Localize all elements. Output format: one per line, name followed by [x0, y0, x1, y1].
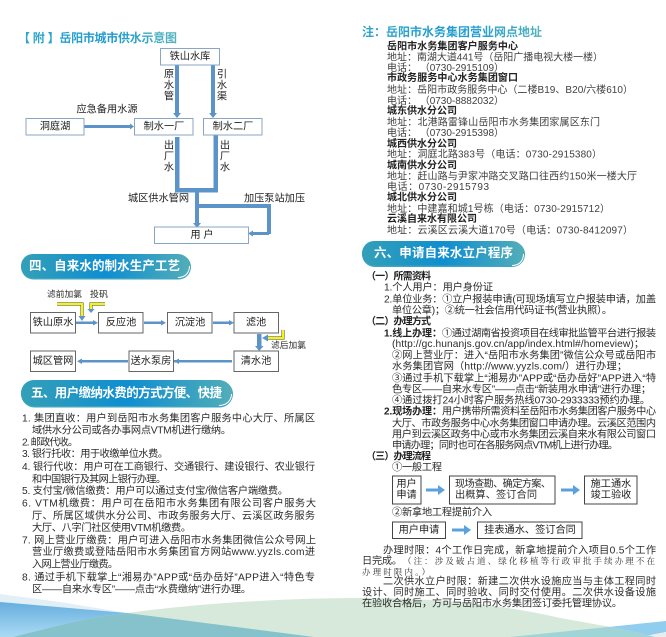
- address list: 城北供水分公司: [387, 190, 457, 204]
- application methods: ④通过拨打24小时客户服务热线0730-2933333预约办理。: [392, 394, 650, 406]
- application methods: (http://gc.hunanjs.gov.cn/app/index.html#/homeview)；: [392, 339, 644, 350]
- label: 城区供水管网: 城区供水管网: [128, 192, 189, 204]
- time limits text: 日完成。: [362, 554, 402, 567]
- address list: 地址：洞庭北路383号（电话：0730-2915380）: [387, 148, 602, 160]
- box: 施工通水: [584, 476, 637, 504]
- box: 制水二厂: 制水二厂: [213, 120, 253, 132]
- arrow: [561, 485, 580, 495]
- application methods: ①通过湖南省投资项目在线审批监管平台进行报装: [442, 326, 656, 340]
- payment methods list: 营业厅缴费或登陆岳阳市水务集团官方网站www.yyzls.com进: [32, 545, 315, 558]
- box: 洞庭湖: 洞庭湖: [40, 120, 70, 132]
- box: 制水二厂: [204, 118, 262, 135]
- address list: 电话： （0730-8882032）: [387, 94, 504, 107]
- diagram: city water supply: [26, 48, 305, 244]
- box: 施工通水: 施工通水: [591, 477, 631, 490]
- label: 原水管: [164, 68, 174, 102]
- box: 铁山原水: [30, 312, 76, 333]
- time limits text: 办理时限内。）: [362, 567, 430, 577]
- box: 用户申请: 用户申请: [399, 523, 439, 536]
- address list: 地址：南湖大道441号（岳阳广播电视大楼一楼）: [387, 50, 603, 64]
- box: 送水泵房: [129, 351, 174, 372]
- payment methods list: 大厅、八字门社区使用VTM机缴费。: [32, 521, 191, 534]
- time limits text: 二次供水立户时限：新建二次供水设施应当与主体工程同时: [383, 574, 656, 588]
- box: 城区管网: [30, 351, 76, 372]
- label: 引水渠: [217, 68, 227, 102]
- address list: 岳阳市水务集团客户服务中心: [387, 40, 518, 52]
- arrow: [452, 525, 471, 535]
- box: 铁山原水: 铁山原水: [33, 316, 73, 328]
- box: 制水一厂: [134, 118, 193, 135]
- dosing: 滤后加氯: 滤后加氯: [271, 339, 306, 350]
- label: 原水管: 管: [164, 90, 174, 102]
- box: 制水一厂: 制水一厂: [144, 120, 184, 132]
- label: 引水渠: 引: [217, 68, 227, 80]
- payment methods list: 3. 银行托收：用于收缴单位水费。: [22, 447, 168, 460]
- label: 出厂水 right: 厂: [220, 152, 230, 162]
- arrows: [76, 320, 264, 364]
- address list: 地址：赶山路与尹家冲路交叉路口往西约150米一楼大厅: [387, 170, 637, 182]
- application methods: 1.线上办理：: [384, 326, 442, 340]
- application materials: 单位公章)；②统一社会信用代码证书(营业执照）。: [392, 304, 612, 316]
- address list: 地址：中建嘉和城1号栋（电话：0730-2915712）: [387, 202, 610, 215]
- address list: 城东供水分公司: [387, 104, 457, 117]
- address list: 地址：北港路雷锋山岳阳市水务集团家属区东门: [387, 116, 600, 128]
- application materials: [366, 270, 656, 316]
- box: 反应池: 反应池: [106, 316, 136, 328]
- section heading: 六: 六、申请自来水立户程序: [374, 245, 513, 260]
- dosing: 滤前加氯: [47, 288, 86, 321]
- section heading: 四: 四、自来水的制水生产工艺: [29, 258, 180, 273]
- arrow: [426, 485, 445, 495]
- section heading: 四: [21, 254, 191, 280]
- box: 现场查勘: 出概算、签订合同: [455, 488, 537, 501]
- label: 引水渠: 渠: [217, 90, 227, 102]
- box: 沉淀池: 沉淀池: [175, 316, 205, 328]
- box: 用户: 用 户: [190, 228, 214, 241]
- label: 出厂水 left: 水: [164, 162, 174, 174]
- payment methods list: 5. 支付宝/微信缴费：用户可以通过支付宝/微信客户端缴费。: [22, 484, 288, 497]
- application materials: 2.单位业务：①立户报装申请(可现场填写立户报装申请，加盖: [384, 292, 656, 306]
- label: 原水管: 水: [164, 80, 174, 92]
- payment methods list: 1. 集团直收：用户到岳阳市水务集团客户服务中心大厅、所属区: [22, 412, 315, 424]
- label: general project: ①一般工程: [392, 460, 442, 474]
- box: 用户申请: [392, 476, 421, 504]
- application methods: （二）办理方式: [366, 314, 431, 328]
- address list: 城南供水分公司: [387, 158, 457, 172]
- payment methods list: 7. 网上营业厅缴费：用户可进入岳阳市水务集团微信公众号网上: [22, 534, 316, 546]
- box: 用户: [154, 227, 248, 244]
- section heading: 五: 五、用户缴纳水费的方式方便、快捷: [31, 385, 222, 400]
- application methods: 用户到云溪区政务中心或市水务集团云溪自来水有限公司窗口: [392, 428, 656, 440]
- time limits text: （注：涉及破占道、绿化移植等行政审批手续办理不在: [403, 556, 655, 566]
- payment methods list: 区——自来水专区”——点击“水费缴纳”进行办理。: [32, 582, 251, 596]
- label: 引水渠: 水: [217, 80, 227, 92]
- time limits text: 在验收合格后，方可与岳阳市水务集团签订委托管理协议。: [362, 596, 622, 610]
- label: 出厂水 right: [220, 138, 230, 174]
- time limits text: 设计、同时施工、同时验收、同时交付使用。二次供水设备设施: [362, 586, 656, 598]
- payment methods list: 8. 通过手机下载掌上“湘易办”APP或“岳办岳好”APP进入“特色专: [22, 570, 315, 584]
- section heading: 五: [21, 380, 233, 408]
- box: 滤池: [234, 312, 278, 333]
- box: 挂表通水: [478, 522, 582, 538]
- application process heading: （三）办理流程: [366, 450, 431, 462]
- payment methods list: 入网上营业厅缴费。: [32, 558, 118, 570]
- payment methods list: 2. 邮政代收。: [22, 436, 78, 448]
- label: 出厂水 left: 厂: [164, 152, 174, 162]
- application methods: ②网上营业厅：进入“岳阳市水务集团”微信公众号或岳阳市: [392, 348, 656, 362]
- box: 清水池: 清水池: [241, 354, 271, 367]
- background waves along the bottom edge: [0, 594, 666, 637]
- application methods: 色专区——自来水专区”——点击“新装用水申请”进行办理；: [392, 382, 651, 396]
- address list: 电话： （0730-2915109）: [387, 61, 504, 74]
- title: city water supply diagram: 【 附 】岳阳市城市供水示意图: [18, 30, 177, 45]
- box: 挂表通水: 挂表通水、签订合同: [484, 523, 576, 536]
- address list: 地址：云溪区云溪大道170号（电话：0730-8412097）: [387, 224, 633, 236]
- box: 沉淀池: [168, 312, 212, 333]
- process flow: water production: [30, 288, 306, 372]
- payment methods list: 厅、所属区域供水分公司、市政务服务大厅、云溪区政务服务: [32, 509, 315, 522]
- box: 滤池: 滤池: [246, 316, 266, 328]
- payment methods list: 6. VTM机缴费：用户可在岳阳市水务集团有限公司客户服务大: [22, 496, 316, 510]
- box: 用户申请: 用户: [396, 477, 417, 490]
- label: 出厂水 right: 水: [220, 162, 230, 174]
- box: 清水池: [234, 351, 278, 372]
- title: service outlet addresses: 注：岳阳市水务集团营业网点地址: [362, 24, 542, 39]
- label: 出厂水 right: 出: [220, 138, 230, 152]
- address list: 城西供水分公司: [387, 137, 457, 150]
- box: 铁山水库: 铁山水库: [170, 50, 210, 62]
- label: 加压泵站加压: 加压泵站加压: [244, 192, 305, 204]
- box: 用户申请: 申请: [396, 488, 417, 501]
- address list: [387, 40, 637, 236]
- payment methods list: 域供水分公司或各办事网点VTM机进行缴纳。: [32, 424, 231, 436]
- address list: 电话：0730-2915793: [387, 180, 489, 193]
- box: 反应池: [98, 312, 143, 333]
- flow: new land project: [392, 522, 582, 538]
- box: 城区管网: 城区管网: [33, 354, 73, 367]
- box: 用户申请: [392, 522, 446, 538]
- label: new land project: ②新拿地工程提前介入: [392, 506, 492, 518]
- application methods: ③通过手机下载掌上“湘易办”APP或“岳办岳好”APP进入“特: [392, 372, 656, 384]
- box: 洞庭湖: [26, 118, 84, 135]
- section heading: 六: [362, 241, 525, 267]
- application materials: 1.个人用户：用户身份证: [384, 280, 493, 294]
- application methods: 2.现场办理：: [384, 404, 442, 418]
- payment methods list: 和中国银行及其网上银行办理。: [32, 472, 166, 486]
- time limits text: [362, 544, 656, 610]
- label: 应急备用水源: 应急备用水源: [76, 102, 138, 116]
- box: 施工通水: 竣工验收: [591, 488, 631, 501]
- box: 铁山水库: [160, 48, 220, 65]
- address list: 市政务服务中心水务集团窗口: [387, 71, 518, 84]
- flow: general project: [392, 476, 637, 504]
- label: 出厂水 left: 出: [164, 138, 174, 152]
- address list: 云溪自来水有限公司: [387, 212, 477, 225]
- dosing: 滤后加氯: [262, 330, 306, 350]
- payment methods list: 4. 银行代收：用户可在工商银行、交通银行、建设银行、农业银行: [22, 460, 315, 473]
- application methods: 用户携带所需资料至岳阳市水务集团客户服务中心: [442, 404, 656, 418]
- time limits text: 办理时限：4个工作日完成，新拿地提前介入项目0.5个工作: [383, 544, 656, 556]
- payment methods list: [22, 412, 316, 596]
- pipes and arrows: [84, 65, 271, 236]
- address list: 地址：岳阳市政务服务中心（二楼B19、B20/六楼610）: [387, 83, 633, 96]
- application methods: [366, 314, 656, 452]
- address list: 电话： （0730-2915398）: [387, 126, 504, 139]
- box: 现场查勘: 现场查勘、确定方案、: [455, 477, 551, 490]
- dosing: 滤前加氯: 滤前加氯: [47, 288, 82, 299]
- application methods: 大厅、市政务服务中心水务集团窗口申请办理。云溪区范围内: [392, 416, 656, 430]
- box: 现场查勘: [450, 476, 555, 504]
- application methods: 水务集团官网（http://www.yyzls.com/）进行办理；: [392, 360, 627, 372]
- application materials: （一）所需资料: [366, 270, 431, 282]
- dosing: 投矾: [88, 288, 108, 313]
- application methods: 申请办理；同时也可在各服务网点VTM机上进行办理。: [392, 438, 618, 452]
- box: 送水泵房: 送水泵房: [131, 354, 171, 367]
- dosing: 投矾: 投矾: [90, 288, 108, 299]
- label: 原水管: 原: [164, 68, 174, 80]
- label: 出厂水 left: [164, 138, 174, 174]
